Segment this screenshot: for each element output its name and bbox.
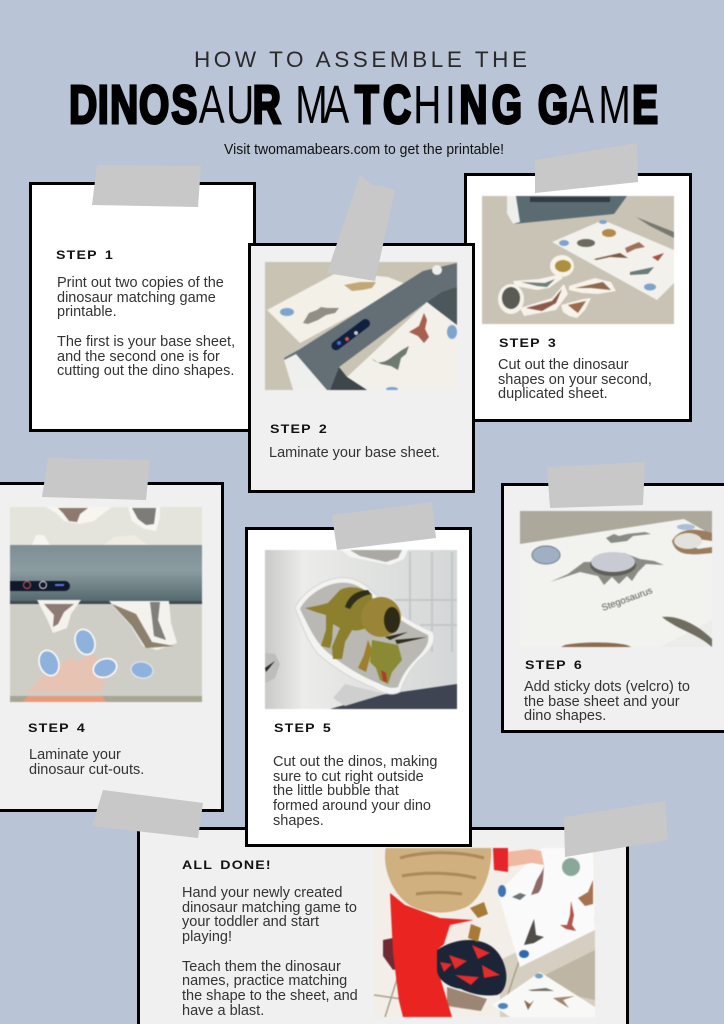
panel: step 1 <box>29 182 256 432</box>
step 5 text: Cut out the dinos, making <box>273 754 437 770</box>
tape: step 3 <box>535 143 638 193</box>
main title: NG <box>459 74 522 134</box>
step 2 text: Laminate your base sheet. <box>269 445 440 461</box>
step 5 text <box>273 754 437 829</box>
step 3 text: Cut out the dinosaur <box>498 357 629 373</box>
main title: AU <box>199 74 254 134</box>
all done text: have a blast. <box>182 1003 264 1019</box>
step 3 text: shapes on your second, <box>498 372 652 388</box>
main title: G <box>538 74 568 134</box>
step 6 label: STEP 6 <box>525 658 583 672</box>
main title: MA <box>295 74 350 134</box>
photo: sticky dots <box>520 510 713 648</box>
step 5 text: shapes. <box>273 813 324 829</box>
step 1 text: printable. <box>57 304 117 320</box>
step 1 text: dinosaur matching game <box>57 290 216 306</box>
tape: step 1 <box>92 165 201 207</box>
step 5 label: STEP 5 <box>274 721 332 735</box>
step 3 label: STEP 3 <box>499 336 557 350</box>
step 1 label: STEP 1 <box>56 248 114 262</box>
panel: step 6 <box>501 483 724 733</box>
step 3 text: duplicated sheet. <box>498 386 608 402</box>
step 3 text <box>498 357 652 402</box>
step 5 text: sure to cut right outside <box>273 769 424 785</box>
photo: sticky dots: Stegosaurus <box>600 585 654 614</box>
tape: step 6 <box>547 462 645 508</box>
step 6 text: dino shapes. <box>524 708 606 724</box>
subtitle: HOW TO ASSEMBLE THE <box>194 47 527 72</box>
step 5 text: the little bubble that <box>273 783 399 799</box>
main title: TC <box>355 74 411 134</box>
header: title block <box>69 47 658 158</box>
tape: step 2 <box>327 175 395 281</box>
panel: step 3 <box>464 173 692 422</box>
all done text: Teach them the dinosaur <box>182 959 341 975</box>
main title <box>69 74 658 134</box>
tape: all done left <box>92 790 203 838</box>
all done text: your toddler and start <box>182 914 319 930</box>
all done text: playing! <box>182 929 232 945</box>
step 4 text: dinosaur cut-outs. <box>29 762 144 778</box>
step 1 text: The first is your base sheet, <box>57 334 235 350</box>
photo: cut out dinosaur shapes <box>482 195 675 324</box>
step 5 text: formed around your dino <box>273 798 431 814</box>
step 4 label: STEP 4 <box>28 721 86 735</box>
step 1 text: cutting out the dino shapes. <box>57 363 234 379</box>
panel: step 4 <box>0 482 224 812</box>
website note: Visit twomamabears.com to get the printable! <box>224 142 504 158</box>
photo: toddler playing <box>374 847 596 1018</box>
photo: triceratops cut-out <box>264 550 458 710</box>
all done text: names, practice matching <box>182 973 347 989</box>
panel: step 5 <box>245 527 472 847</box>
step 6 text <box>524 679 690 724</box>
step 6 text: the base sheet and your <box>524 694 680 710</box>
main title: HI <box>413 74 456 134</box>
main title: AM <box>568 74 631 134</box>
step 1 text <box>57 275 235 379</box>
all done text: Hand your newly created <box>182 885 342 901</box>
step 1 text: Print out two copies of the <box>57 275 224 291</box>
panel: step 2 <box>248 243 475 493</box>
all done text: dinosaur matching game to <box>182 900 357 916</box>
all done text: the shape to the sheet, and <box>182 988 358 1004</box>
tape: step 5 <box>332 502 436 550</box>
step 6 text: Add sticky dots (velcro) to <box>524 679 690 695</box>
all done text <box>182 885 358 1019</box>
photo: laminating the cut-outs <box>9 507 203 703</box>
step 4 text: Laminate your <box>29 747 121 763</box>
tape: step 4 <box>42 458 150 500</box>
panel: all done <box>137 827 629 1024</box>
all done label: ALL DONE! <box>182 858 272 872</box>
photo: laminator <box>264 262 458 391</box>
main title: E <box>632 74 658 134</box>
step 1 text: and the second one is for <box>57 349 220 365</box>
tape: all done right <box>564 801 668 857</box>
step 4 text <box>29 747 144 778</box>
main title: R <box>253 74 281 134</box>
main title: DINOS <box>69 74 197 134</box>
step 2 label: STEP 2 <box>270 422 328 436</box>
